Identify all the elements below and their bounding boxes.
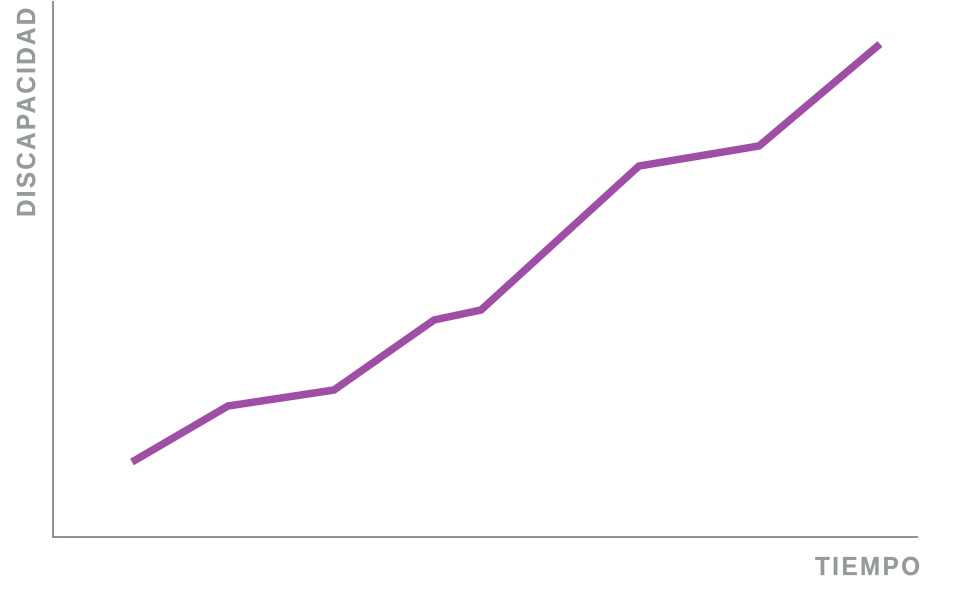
x axis label: TIEMPO [815,552,920,581]
data line [132,44,880,462]
y axis label: DISCAPACIDAD [12,8,41,217]
